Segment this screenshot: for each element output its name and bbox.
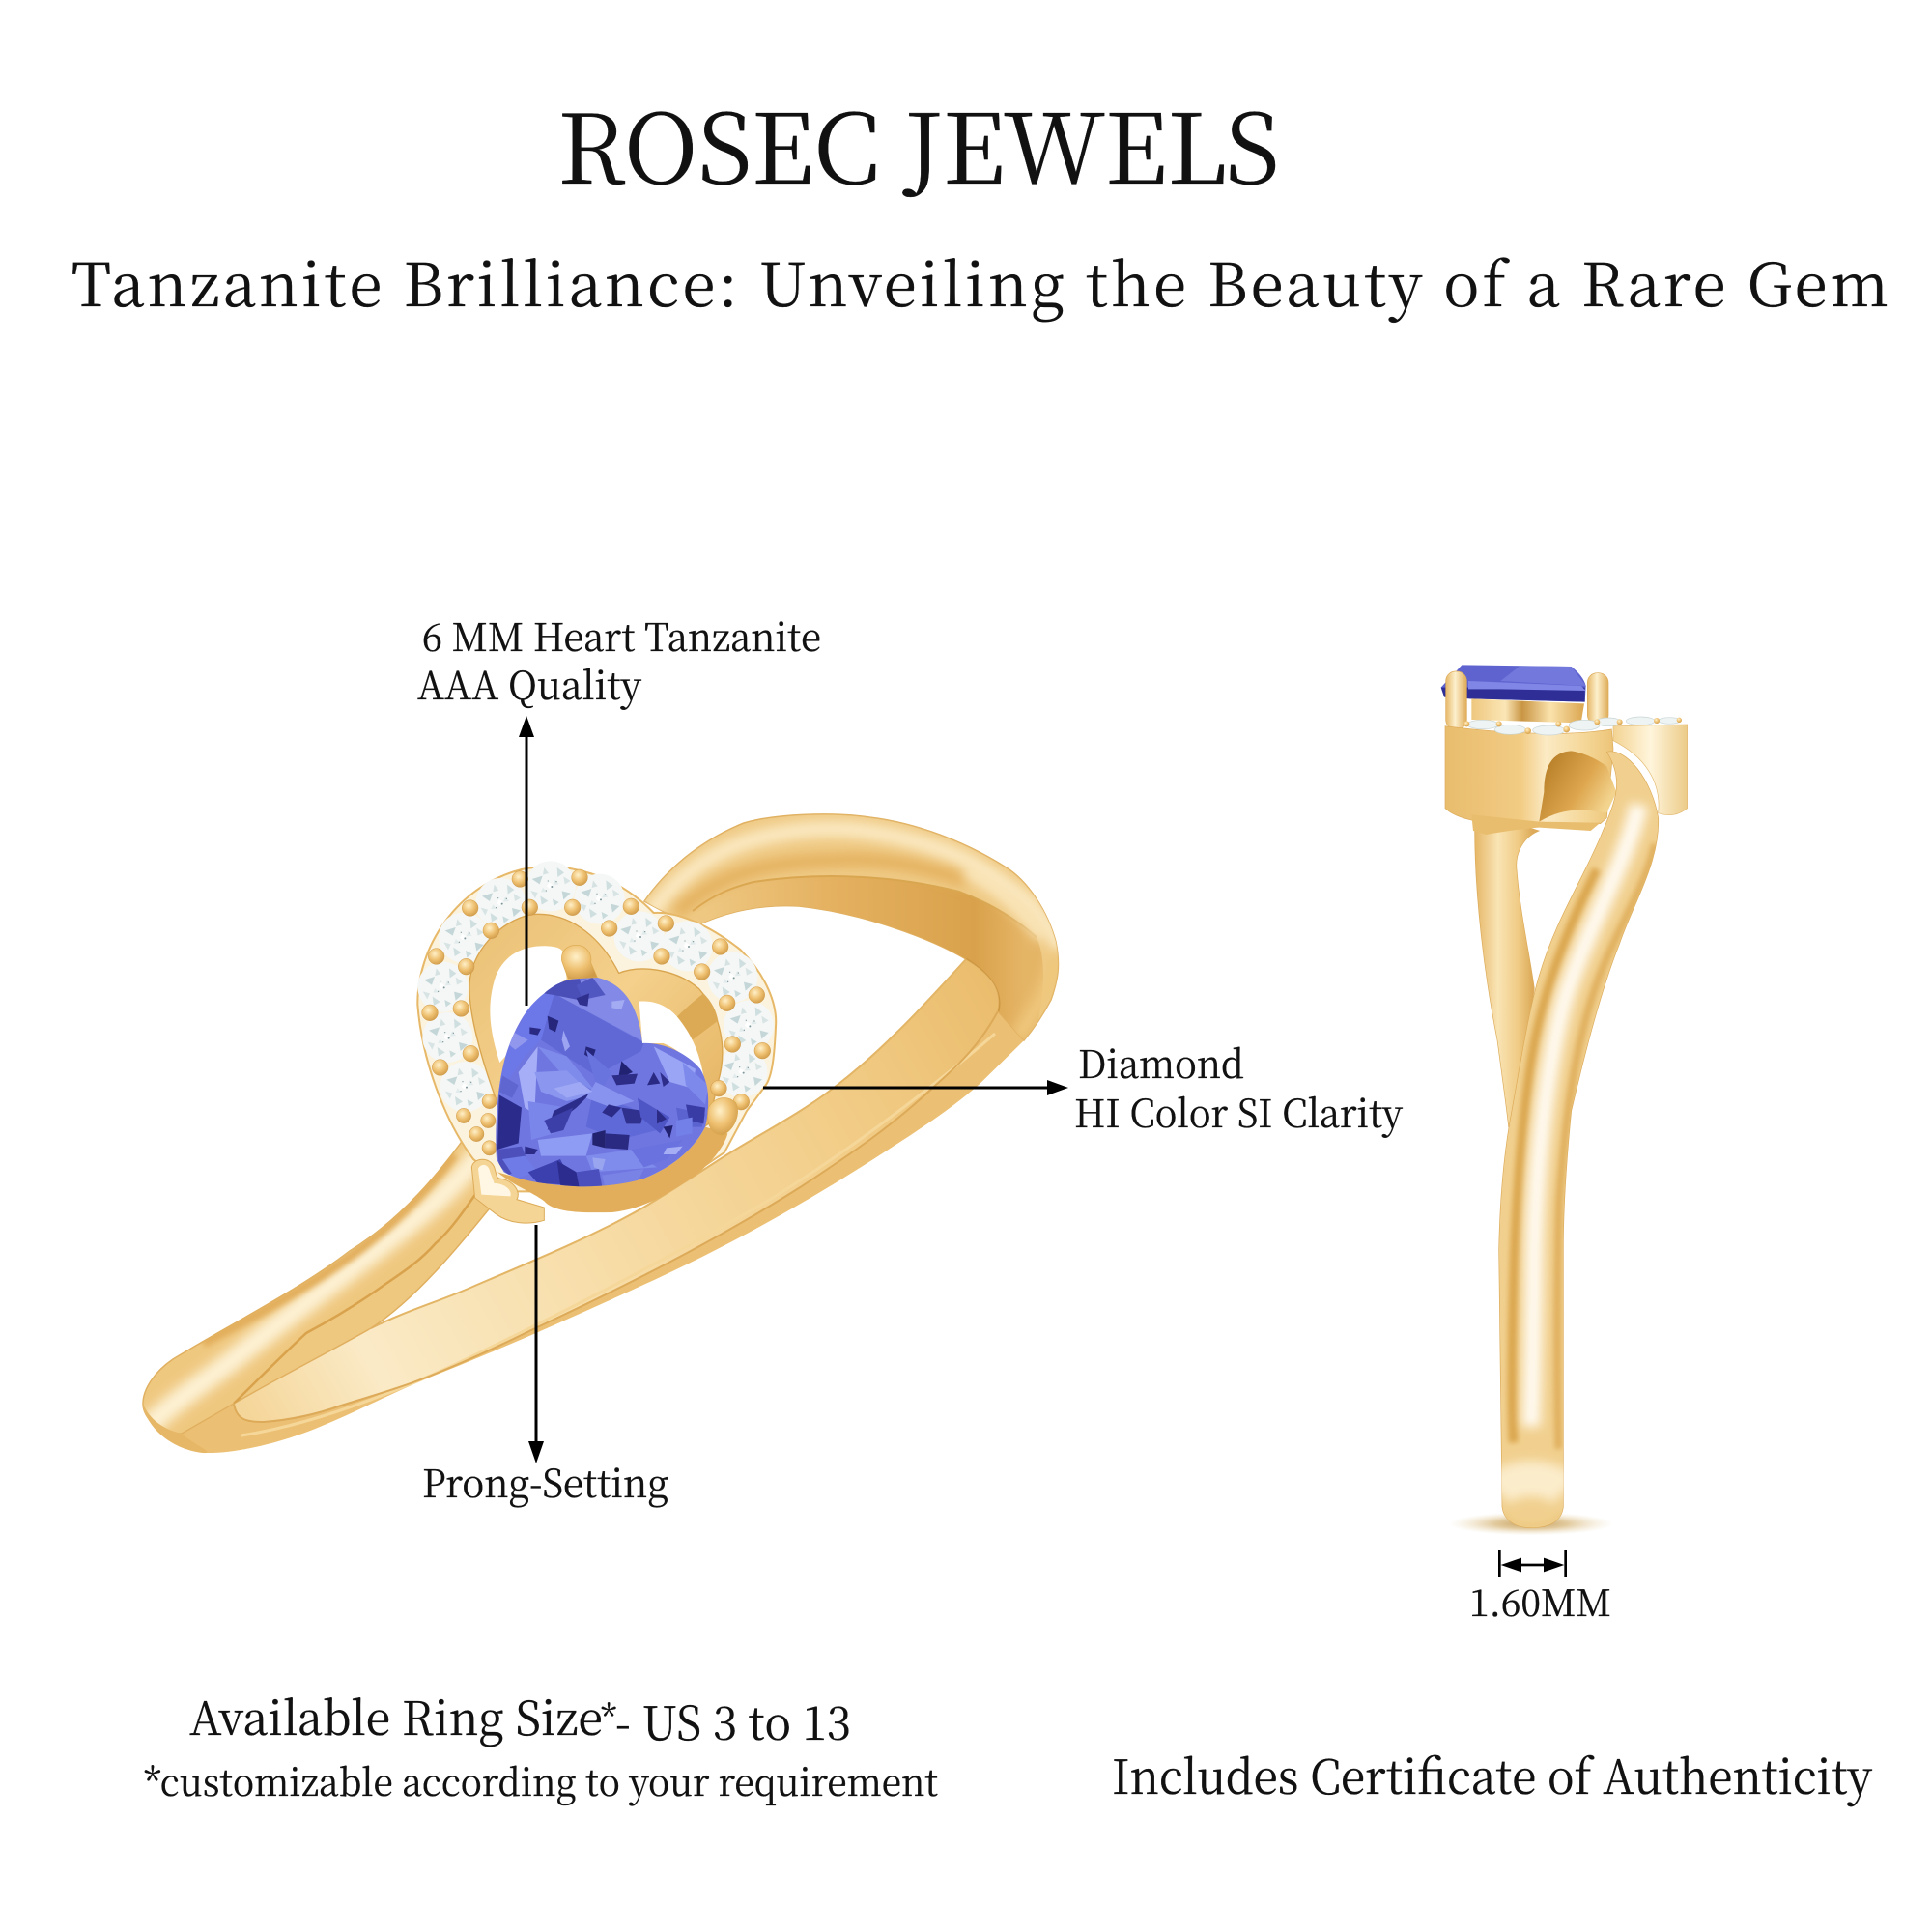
gem facets (1500, 666, 1586, 686)
prong beads (422, 869, 771, 1155)
V prong highlight (478, 1165, 511, 1196)
girdle under block (1471, 814, 1601, 835)
prong left (1446, 671, 1466, 729)
asterisk: * (601, 1691, 616, 1739)
small diamonds row (1467, 717, 1681, 735)
width bracket (1498, 1550, 1567, 1577)
bezel under gem (497, 1127, 727, 1212)
shank shading (1497, 805, 1655, 1525)
upper arm shading (647, 829, 1063, 1040)
band bottom fold (143, 1404, 208, 1453)
opening left (490, 946, 567, 1063)
ring size line: Available Ring Size (189, 1682, 603, 1748)
back arm (1475, 826, 1539, 1127)
band seen through opening (676, 993, 718, 1040)
strip highlight (242, 1034, 995, 1435)
diamond label text: HI Color SI Clarity (1074, 1084, 1404, 1139)
small beads row (1463, 718, 1682, 734)
heart setting (417, 861, 776, 1223)
us sizes: - US 3 to 13 (615, 1687, 851, 1753)
main twisting shank (1497, 752, 1659, 1528)
strip top line (234, 1011, 998, 1422)
left arm shading (145, 1150, 493, 1430)
band width label: 1.60MM (1469, 1574, 1611, 1627)
callout: gem label (417, 608, 821, 1006)
inner bezel (469, 914, 723, 1172)
top prong (561, 945, 597, 979)
gallery (1471, 698, 1584, 723)
heart tanzanite (493, 974, 712, 1190)
arrow up (519, 716, 534, 1006)
diamond label text: Diamond (1078, 1035, 1244, 1090)
gem light strip (1468, 681, 1586, 691)
certificate note: Includes Certificate of Authenticity (1112, 1741, 1873, 1808)
base shadow (1449, 1512, 1613, 1535)
opening right (639, 1001, 703, 1075)
gem label text: 6 MM Heart Tanzanite (422, 608, 821, 663)
subtitle: Tanzanite Brilliance: Unveiling the Beauty of a Rare Gem (71, 238, 1889, 324)
gem side (1441, 665, 1586, 702)
side ring view (1441, 665, 1688, 1577)
lower band surface (182, 959, 1024, 1453)
upper arm (644, 814, 1063, 1040)
halo diamonds (417, 861, 774, 1112)
main ring: front view (143, 814, 1063, 1453)
title: ROSEC JEWELS (557, 72, 1280, 212)
gem label text (417, 608, 821, 711)
arrow down (528, 1225, 544, 1463)
callout: diamond label (763, 1035, 1404, 1139)
gem crown (1441, 665, 1586, 702)
gem girdle (1441, 688, 1585, 702)
prong right (1587, 673, 1608, 724)
right prong (708, 1097, 738, 1135)
head block (1445, 726, 1613, 824)
V prong (471, 1159, 544, 1223)
right block (1613, 724, 1688, 815)
callout: prong label (422, 1225, 668, 1509)
band upper edge line (371, 959, 966, 1328)
prong label text: Prong-Setting (422, 1454, 668, 1509)
halo plate (417, 867, 776, 1191)
lower band outer strip (182, 1011, 1024, 1453)
ring size text (189, 1682, 851, 1753)
head arch (1539, 751, 1616, 822)
ring band (143, 814, 1063, 1453)
customization note: *customizable according to your requirement (144, 1753, 938, 1807)
arrow right (763, 1080, 1068, 1095)
diamond label text (1074, 1035, 1404, 1139)
gem label text: AAA Quality (417, 656, 642, 711)
left arm (142, 1142, 490, 1434)
